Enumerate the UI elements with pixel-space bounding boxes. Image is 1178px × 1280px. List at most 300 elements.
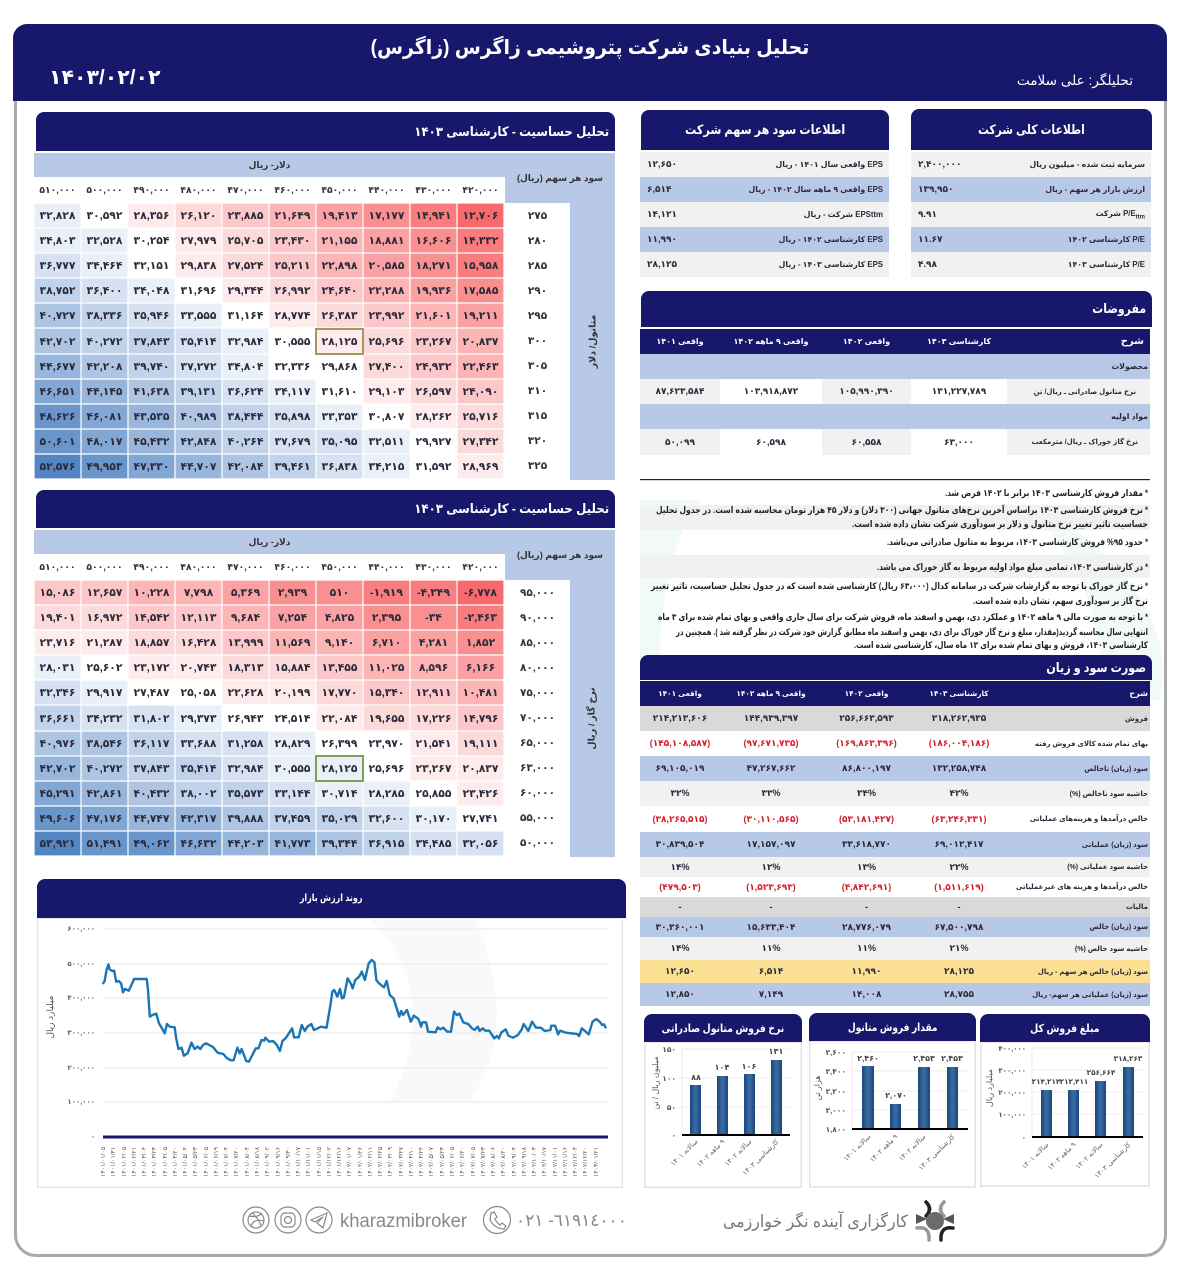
heatmap grid: ۲۶,۳۸۳ — [322, 310, 357, 322]
heatmap grid: ۲۵,۶۰۲ — [87, 662, 122, 674]
income statement table: ۶۹,۱۰۵,۰۱۹ — [656, 763, 704, 773]
heatmap grid: ۳۲,۶۰۰ — [369, 813, 404, 825]
heatmap grid: ۱۸,۲۷۱ — [416, 260, 451, 272]
line chart: ۱۴۰۱/۰۵/۲۳ — [192, 1146, 199, 1177]
heatmap grid: ۲۵,۷۰۵ — [228, 235, 263, 247]
heatmap grid: ۱۹,۹۳۶ — [416, 285, 451, 297]
income statement table: ۱۵,۶۳۳,۴۰۴ — [747, 922, 795, 932]
line chart: ۱۴۰۲/۱۰/۰۳ — [531, 1146, 538, 1177]
bar chart: ۱۰۰,۰۰۰ — [998, 1112, 1026, 1119]
phone number: ٠٢١ -٦١٩١٤٠٠٠ — [516, 1211, 627, 1230]
heading: مفروضات — [1092, 301, 1146, 316]
heatmap grid: ۳۴,۱۱۷ — [275, 386, 310, 398]
heatmap grid: ۲۴,۹۳۲ — [416, 361, 451, 373]
heatmap grid: ۳۹,۴۶۱ — [275, 461, 310, 473]
bar chart: سالانه ۱۴۰۱ — [670, 1138, 700, 1168]
line chart: ۱۴۰۱/۰۷/۰۴ — [223, 1147, 230, 1177]
heatmap grid: ۲۳,۴۳۰ — [275, 235, 310, 247]
eps header: سود هر سهم (ریال) — [517, 550, 603, 560]
heatmap grid: ۲۳,۹۷۰ — [369, 738, 404, 750]
heatmap grid: ۶,۷۱۰ — [372, 637, 401, 649]
heatmap grid: ۲۸,۱۲۵ — [322, 336, 357, 348]
eps table: ۱۱,۹۹۰ — [647, 234, 677, 244]
heatmap grid: ۵۰,۶۰۱ — [40, 436, 75, 448]
bar chart: سالانه ۱۴۰۱ — [843, 1133, 873, 1163]
methanol price labels: ۳۲۰ — [528, 435, 547, 447]
heatmap grid: ۱۹,۶۵۵ — [369, 713, 404, 725]
bar chart: ۲,۴۰۰ — [826, 1067, 846, 1076]
gas price labels — [520, 587, 555, 849]
line chart: ۱۴۰۱/۰۸/۱۸ — [254, 1146, 261, 1177]
income statement table: (۱۸۶,۰۰۴,۱۸۶) — [929, 738, 989, 748]
footer: phone and social contacts — [242, 1206, 627, 1234]
line chart: ۱۴۰۱/۰۴/۰۵ — [162, 1147, 169, 1177]
heatmap grid: ۴۱,۶۳۸ — [134, 386, 169, 398]
dollar values: ۴۹۰,۰۰۰ — [133, 562, 170, 572]
heatmap grid: ۳۵,۴۱۴ — [181, 336, 216, 348]
line chart: ۵۰۰,۰۰۰ — [67, 961, 95, 968]
assumptions table: ۱۰۵,۹۹۰,۳۹۰ — [839, 386, 894, 396]
heatmap grid: ۳۱,۲۵۸ — [228, 738, 263, 750]
income statement table: ۱۳% — [857, 862, 876, 872]
panel: total sales chart — [980, 1014, 1150, 1187]
heatmap grid: ۱۵,۰۸۶ — [40, 587, 75, 599]
bar chart: کارشناسی ۱۴۰۳ — [741, 1137, 781, 1177]
heatmap grid: ۲۹,۸۳۸ — [181, 260, 216, 272]
heatmap grid: ۴۰,۹۷۶ — [40, 738, 75, 750]
info table: ۲,۴۰۰,۰۰۰ — [918, 159, 961, 169]
methanol price labels: ۲۹۰ — [528, 285, 547, 297]
heatmap grid: ۴۲,۳۱۷ — [181, 813, 216, 825]
heading — [37, 879, 626, 918]
line chart: ۱۴۰۱/۱۱/۱۵ — [316, 1147, 323, 1177]
heatmap grid: ۲۹,۹۲۷ — [416, 436, 451, 448]
dollar values — [39, 562, 499, 572]
heatmap grid: ۴۲,۸۴۸ — [181, 436, 216, 448]
line chart: ۱۴۰۲/۰۸/۲۰ — [500, 1147, 507, 1177]
heatmap grid: ۳۶,۶۶۱ — [40, 713, 75, 725]
income statement table: ۲۸,۱۲۵ — [944, 966, 974, 976]
heatmap grid: ۳۷,۸۴۳ — [134, 336, 169, 348]
line chart: ۱۴۰۱/۰۹/۱۶ — [275, 1147, 282, 1177]
heatmap grid: ۴۰,۲۷۲ — [87, 336, 122, 348]
heatmap grid: ۳۰,۸۰۷ — [369, 411, 404, 423]
line chart: ۱۴۰۲/۰۲/۲۵ — [377, 1147, 384, 1177]
heatmap grid: ۳۷,۴۵۹ — [275, 813, 310, 825]
bar chart: ۹ ماهه ۱۴۰۲ — [1047, 1141, 1078, 1172]
line chart: ۱۴۰۲/۰۷/۰۵ — [470, 1147, 477, 1177]
methanol price labels: ۲۹۵ — [528, 310, 547, 322]
heatmap grid: ۲۵,۶۹۶ — [369, 336, 404, 348]
footer: brokerage logo and name — [723, 1200, 955, 1242]
line chart: ۱۴۰۲/۰۸/۰۶ — [490, 1147, 497, 1177]
info table: P/Ettm شرکت — [1096, 209, 1145, 220]
income statement table: مالیات — [1126, 904, 1148, 911]
heatmap grid: ۲۸,۰۳۱ — [40, 662, 75, 674]
line chart: ۱۴۰۱/۱۱/۰۱ — [305, 1147, 312, 1177]
heading: روند ارزش بازار — [300, 893, 363, 904]
income statement table: ۷,۱۴۹ — [759, 989, 783, 999]
heatmap grid: ۳۷,۸۴۳ — [134, 763, 169, 775]
line chart: ۱۴۰۱/۰۵/۰۴ — [182, 1147, 189, 1177]
income statement table: ۳۳% — [762, 788, 780, 798]
heading: نرخ فروش متانول صادراتی — [662, 1022, 784, 1034]
base case highlight — [315, 328, 364, 355]
income statement table: ۱۲,۶۵۰ — [665, 966, 695, 976]
bar chart — [980, 1042, 1150, 1187]
heatmap grid: ۲۳,۴۲۶ — [463, 788, 498, 800]
income statement table: ۸۶,۸۰۰,۱۹۷ — [842, 763, 891, 773]
bar chart: ۸۸ — [691, 1073, 701, 1082]
header banner — [13, 24, 1167, 101]
heatmap grid: ۳۱,۱۶۴ — [228, 310, 263, 322]
gas price labels: ۷۰,۰۰۰ — [520, 712, 555, 724]
heatmap grid: ۳۴,۸۰۳ — [40, 235, 75, 247]
heatmap grid: ۵۱۰ — [330, 587, 349, 599]
heatmap grid: ۵,۳۶۹ — [231, 587, 260, 599]
heatmap grid: ۲۲,۴۶۳ — [463, 361, 498, 373]
icon: phone — [484, 1206, 510, 1234]
bar chart: ۲,۰۰۰ — [826, 1106, 846, 1115]
heatmap grid: ۲,۹۳۹ — [278, 587, 307, 599]
heatmap grid: ۴۲,۷۰۲ — [40, 336, 75, 348]
heatmap grid: ۴,۲۸۱ — [419, 637, 448, 649]
panel: earnings per share info — [640, 110, 889, 277]
income statement table: ۶۹,۰۱۲,۴۱۷ — [935, 839, 983, 849]
income statement table: (۴,۸۴۲,۶۹۱) — [842, 882, 891, 892]
date: ۱۴۰۳/۰۲/۰۲ — [49, 66, 160, 89]
heatmap grid: ۴۵,۴۳۲ — [134, 436, 169, 448]
heatmap grid: ۲۳,۲۶۷ — [416, 763, 451, 775]
eps table: ۲۸,۱۲۵ — [647, 259, 677, 269]
income statement table: - — [770, 902, 772, 912]
bar chart: سالانه ۱۴۰۲ — [1075, 1141, 1105, 1171]
heatmap grid: ۴۸,۰۱۷ — [87, 436, 122, 448]
icon: brokerage logo — [916, 1202, 954, 1240]
heatmap grid: ۳۲,۱۵۱ — [134, 260, 169, 272]
heatmap grid: ۲۳,۷۱۶ — [40, 637, 75, 649]
income statement table: کارشناسی ۱۴۰۳ — [929, 689, 989, 698]
eps table — [640, 152, 889, 277]
panel: methanol sales volume chart — [809, 1013, 976, 1188]
bar chart: ۲۱۴,۲۱۴ — [1032, 1077, 1061, 1086]
income statement table: سود (زیان) عملیاتی — [1082, 842, 1148, 848]
line chart: ۱۴۰۲/۰۱/۰۷ — [346, 1146, 353, 1177]
heatmap grid: ۲۹,۱۰۳ — [369, 386, 404, 398]
heatmap grid: ۴۹,۶۰۶ — [40, 813, 75, 825]
income statement table: (۳۸,۲۶۵,۵۱۵) — [653, 814, 707, 824]
dollar values: ۴۹۰,۰۰۰ — [133, 185, 170, 195]
heading: تحلیل حساسیت - کارشناسی ۱۴۰۳ — [414, 501, 609, 516]
line chart: ۱۴۰۱/۱۰/۱۷ — [295, 1146, 302, 1177]
info table: P/E کارشناسی ۱۴۰۳ — [1068, 260, 1145, 269]
line chart: ۱۴۰۱/۰۲/۰۵ — [121, 1147, 128, 1177]
heatmap grid: ۱۶,۶۰۶ — [416, 235, 451, 247]
heatmap grid: ۱۷,۲۲۶ — [416, 713, 451, 725]
heatmap grid: ۲۷,۵۲۴ — [228, 260, 263, 272]
heading — [640, 655, 1152, 680]
heatmap grid: -۴,۳۴۹ — [417, 587, 450, 599]
gas price labels: ۹۵,۰۰۰ — [520, 587, 555, 599]
line chart: ۱۴۰۲/۰۹/۰۴ — [511, 1147, 518, 1177]
bar chart: ۲,۴۶۰ — [857, 1054, 879, 1063]
assumptions table: ۶۰,۵۵۸ — [852, 436, 881, 446]
heatmap grid: ۲۹,۳۴۴ — [228, 285, 263, 297]
icon: instagram — [275, 1207, 301, 1233]
panel: company general info — [911, 109, 1152, 277]
heatmap grid: ۲۰,۵۸۵ — [369, 260, 404, 272]
heatmap grid: ۴۶,۰۸۱ — [87, 411, 122, 423]
income statement table: ۲۵۶,۶۶۳,۵۹۳ — [839, 713, 894, 723]
heatmap grid: ۲۱,۶۰۱ — [416, 310, 451, 322]
dollar values: ۴۲۰,۰۰۰ — [462, 185, 499, 195]
bar chart: ۲,۲۰۰ — [826, 1087, 846, 1096]
income statement table: سود (زیان) خالص هر سهم - ریال — [1038, 968, 1148, 976]
bar chart — [644, 1042, 802, 1188]
heatmap grid: ۱۰,۲۲۸ — [134, 587, 169, 599]
dollar values: ۵۰۰,۰۰۰ — [86, 185, 123, 195]
heading — [641, 291, 1152, 327]
income statement table: ۱۴% — [670, 943, 690, 953]
assumptions table: واقعی ۹ ماهه ۱۴۰۲ — [733, 337, 809, 346]
assumptions table: کارشناسی ۱۴۰۳ — [927, 337, 991, 346]
heatmap grid: ۲۵,۶۹۶ — [369, 763, 404, 775]
income statement table: (۵۳,۱۸۱,۴۲۷) — [839, 814, 894, 824]
heatmap grid: ۳۸,۳۳۶ — [87, 310, 122, 322]
income statement table: (۴۷۹,۵۰۳) — [659, 882, 701, 892]
heatmap grid: ۱۸,۸۵۷ — [134, 637, 169, 649]
heatmap grid: ۲۷,۴۸۷ — [134, 687, 169, 699]
heatmap grid: ۲۲,۸۹۸ — [322, 260, 357, 272]
bar chart: ۱۳۱ — [769, 1047, 783, 1056]
heatmap grid: ۲۶,۳۹۹ — [322, 738, 357, 750]
line chart: ۱۴۰۲/۱۰/۱۷ — [541, 1146, 548, 1177]
heatmap grid: ۲۵,۸۵۵ — [416, 788, 451, 800]
heatmap grid: ۲۷,۷۴۱ — [463, 813, 498, 825]
heatmap grid: ۳۲,۵۱۱ — [369, 436, 404, 448]
income statement table: سود (زیان) خالص — [1089, 924, 1148, 931]
heatmap grid: ۳۲,۹۸۴ — [228, 336, 263, 348]
heatmap grid: ۲۹,۸۶۸ — [322, 361, 357, 373]
heatmap grid: ۳۹,۳۴۴ — [322, 838, 357, 850]
heatmap grid: ۳۰,۲۵۴ — [134, 235, 169, 247]
heatmap grid: ۴۰,۲۶۴ — [228, 436, 263, 448]
income statement table: شرح — [1129, 689, 1148, 698]
heading — [911, 109, 1152, 150]
bar chart: ۱۰۰ — [662, 1074, 676, 1083]
heatmap grid: ۳۹,۸۸۸ — [228, 813, 263, 825]
bar chart: هزار تن — [813, 1075, 822, 1101]
heatmap grid: ۱۸,۳۱۳ — [228, 662, 263, 674]
heatmap grid: ۴۰,۷۲۷ — [40, 310, 75, 322]
heatmap grid: ۴۸,۶۲۶ — [40, 411, 75, 423]
bar chart: ۲,۰۷۰ — [885, 1091, 907, 1100]
eps table: EPS کارشناسی ۱۴۰۲ - ریال — [779, 235, 883, 244]
eps table: ۱۲,۶۵۰ — [647, 159, 677, 169]
side axis label — [570, 203, 615, 480]
assumptions table: ۶۳,۰۰۰ — [944, 436, 974, 446]
heatmap grid: ۴۴,۱۴۵ — [87, 386, 122, 398]
heatmap grid: ۲۱,۶۴۹ — [275, 210, 310, 222]
heatmap grid: ۱۹,۴۰۱ — [40, 612, 75, 624]
income statement table: ۱۲,۸۵۰ — [665, 989, 695, 999]
heatmap grid: ۲۳,۹۹۲ — [369, 310, 404, 322]
line chart: ۱۴۰۱/۰۶/۰۵ — [203, 1147, 210, 1177]
heatmap grid: ۳۴,۰۴۸ — [134, 285, 169, 297]
dollar values: ۴۶۰,۰۰۰ — [274, 185, 311, 195]
heatmap grid: ۴۶,۶۳۲ — [181, 838, 216, 850]
heatmap grid: ۲۱,۱۵۵ — [322, 235, 357, 247]
bar chart: میلیون ریال / تن — [651, 1056, 660, 1110]
heatmap grid: ۲۸,۲۶۲ — [416, 411, 451, 423]
heatmap grid — [34, 204, 504, 478]
heatmap grid — [34, 580, 504, 856]
income statement table: ۱۴۴,۹۳۹,۳۹۷ — [744, 713, 798, 723]
info table: ۱۳۹,۹۵۰ — [918, 184, 953, 194]
heading — [644, 1014, 802, 1042]
assumptions table: نرخ گاز خوراک ـ ریال/ مترمکعب — [1031, 439, 1138, 446]
heatmap grid: ۱۵,۹۵۸ — [463, 260, 498, 272]
notes block: * در کارشناسی ۱۴۰۳، تمامی مبلغ مواد اولیه مربوط به گاز خوراک می باشد. — [877, 561, 1148, 573]
dollar rate header — [34, 153, 505, 177]
heatmap grid: ۱۹,۱۱۱ — [463, 738, 498, 750]
gas price labels: ۷۵,۰۰۰ — [520, 687, 555, 699]
heatmap grid: ۳۵,۰۲۹ — [322, 813, 357, 825]
eps table: ۱۴,۱۲۱ — [647, 209, 677, 219]
heatmap grid: ۲۰,۸۳۷ — [463, 763, 498, 775]
heading: مبلغ فروش کل — [1030, 1022, 1100, 1034]
heatmap grid: ۷,۷۹۸ — [184, 587, 213, 599]
heatmap grid: ۱۲,۹۱۱ — [416, 687, 451, 699]
heatmap grid: -۱,۹۱۹ — [370, 587, 403, 599]
bar chart: ۳۰۰,۰۰۰ — [998, 1068, 1026, 1075]
heading — [980, 1014, 1150, 1042]
bar chart: سالانه ۱۴۰۲ — [724, 1138, 754, 1168]
heatmap grid: ۲۷,۹۷۹ — [181, 235, 216, 247]
line chart: ۱۴۰۲/۰۶/۲۰ — [459, 1147, 466, 1177]
dollar values: ۴۸۰,۰۰۰ — [180, 185, 217, 195]
methanol price labels: ۳۲۵ — [528, 460, 547, 472]
methanol price labels: ۲۸۰ — [528, 235, 547, 247]
heatmap grid: ۲۶,۵۹۷ — [416, 386, 451, 398]
line chart: میلیارد ریال — [45, 995, 55, 1038]
assumptions table: مواد اولیه — [1111, 412, 1148, 421]
gas price labels: ۶۵,۰۰۰ — [520, 737, 555, 749]
heatmap grid: -۲,۴۶۳ — [464, 612, 497, 624]
income statement table: ۳۲% — [670, 788, 690, 798]
panel: sensitivity table methanol-dollar — [34, 112, 615, 480]
heatmap grid: ۳۱,۸۰۲ — [134, 713, 169, 725]
income statement table: ۳۰,۳۶۰,۰۰۱ — [656, 922, 704, 932]
heatmap grid: ۱۱,۰۲۵ — [369, 662, 404, 674]
income statement table: ۱۴,۰۰۸ — [852, 989, 881, 999]
line chart: ۱۴۰۲/۱۱/۱۶ — [562, 1147, 569, 1177]
eps header: سود هر سهم (ریال) — [517, 172, 603, 182]
line chart: ۱۴۰۲/۰۹/۱۸ — [521, 1146, 528, 1177]
heatmap grid: ۵۱,۴۹۱ — [87, 838, 122, 850]
income statement table: خالص درآمدها و هزینه‌های عملیاتی — [1030, 816, 1148, 823]
brokerage name: کارگزاری آینده نگر خوارزمی — [723, 1210, 909, 1231]
heading — [809, 1013, 976, 1041]
heatmap grid: ۴,۸۲۵ — [325, 612, 354, 624]
income statement table: ۴۲% — [950, 788, 968, 798]
info table: ۴.۹۸ — [918, 259, 937, 269]
notes block: * با توجه به صورت مالی ۹ ماهه ۱۴۰۲ و عملکرد دی، بهمن و اسفند ماه، فروش شرکت برای سال جاری واقعی و بهای تمام شده برای ۳ ماه — [658, 612, 1148, 623]
line chart: ۱۴۰۱/۰۶/۱۹ — [213, 1146, 220, 1177]
income statement table: ۱۷,۱۵۷,۰۹۷ — [747, 839, 795, 849]
eps table: EPSttm شرکت - ریال — [804, 210, 883, 219]
heatmap grid: ۲۵,۷۱۶ — [463, 411, 498, 423]
heatmap grid: ۳۲,۵۲۸ — [87, 235, 122, 247]
income statement table: ۱۱,۹۹۰ — [852, 966, 881, 976]
heatmap grid: ۲۹,۳۷۳ — [181, 713, 216, 725]
eps table: ۶,۵۱۴ — [647, 184, 671, 194]
income statement table: ۲۸,۷۷۶,۰۷۹ — [842, 922, 891, 932]
income statement table: ۱۳۲,۲۵۸,۷۴۸ — [932, 763, 986, 773]
heatmap grid: ۲۳,۱۷۲ — [134, 662, 169, 674]
heatmap grid: ۲۸,۲۸۵ — [369, 788, 404, 800]
bar chart — [809, 1041, 976, 1188]
heatmap grid: ۳۲,۳۳۶ — [275, 361, 310, 373]
income statement table: (۳۰,۱۱۰,۵۶۵) — [744, 814, 798, 824]
heatmap grid: -۶,۷۷۸ — [464, 587, 497, 599]
line chart: ۳۰۰,۰۰۰ — [67, 1030, 95, 1037]
heatmap grid: ۴۰,۹۸۹ — [181, 411, 216, 423]
line chart: ۱۴۰۲/۰۴/۲۴ — [418, 1147, 425, 1177]
line chart: ۱۴۰۲/۰۵/۲۳ — [439, 1146, 446, 1177]
gas price labels: ۹۰,۰۰۰ — [520, 612, 555, 624]
side axis label — [570, 580, 615, 857]
bar chart: ۱۰۴ — [715, 1063, 729, 1072]
heatmap grid: ۱۴,۵۴۲ — [134, 612, 169, 624]
heatmap grid: ۲۲,۲۸۸ — [369, 285, 404, 297]
heading — [36, 490, 615, 528]
heatmap grid: ۱۹,۴۱۳ — [322, 210, 357, 222]
heatmap grid: ۳۹,۱۳۱ — [181, 386, 216, 398]
heatmap grid: ۳۵,۵۷۳ — [228, 788, 263, 800]
income statement table: ۳۱۸,۲۶۲,۹۳۵ — [932, 713, 986, 723]
methanol price labels — [528, 210, 547, 472]
assumptions table: ۱۰۳,۹۱۸,۸۷۲ — [744, 386, 798, 396]
heatmap grid: ۳۴,۲۱۵ — [369, 461, 404, 473]
dollar values: ۴۵۰,۰۰۰ — [321, 185, 358, 195]
heatmap grid: ۲۶,۹۹۲ — [275, 285, 310, 297]
income statement table: سود (زیان) ناخالص — [1084, 766, 1148, 772]
heatmap grid: ۲۲,۶۲۸ — [228, 687, 263, 699]
website handle: kharazmibroker — [340, 1211, 468, 1232]
dollar values: ۵۰۰,۰۰۰ — [86, 562, 123, 572]
info table: ۱۱.۶۷ — [918, 234, 942, 244]
heatmap grid: ۱۱,۵۶۹ — [275, 637, 310, 649]
assumptions table: ۵۰,۰۹۹ — [665, 436, 695, 446]
heatmap grid: ۳۵,۴۱۴ — [181, 763, 216, 775]
heatmap grid: ۱۵,۳۴۰ — [369, 687, 404, 699]
line chart: ۱۴۰۱/۰۱/۳۱ — [110, 1147, 117, 1177]
income statement table: ۶,۵۱۴ — [759, 966, 783, 976]
heatmap grid: ۳۸,۰۰۲ — [181, 788, 216, 800]
bar chart: سالانه ۱۴۰۲ — [898, 1133, 928, 1163]
income statement table: حاشیه سود ناخالص (%) — [1070, 790, 1148, 798]
line chart: ۰ — [91, 1134, 95, 1141]
heatmap grid: ۴۴,۷۴۷ — [134, 813, 169, 825]
heatmap grid: ۲۰,۸۳۷ — [463, 336, 498, 348]
heatmap grid: ۲۸,۹۶۹ — [463, 461, 498, 473]
eps table: EPS واقعی ۹ ماهه سال ۱۴۰۲ - ریال — [749, 185, 883, 194]
heatmap grid: ۱۹,۲۱۱ — [463, 310, 498, 322]
methanol price labels: ۲۸۵ — [528, 260, 547, 272]
income statement table: خالص درآمدها و هزینه های غیرعملیاتی — [1016, 884, 1148, 891]
assumptions table — [640, 329, 1150, 455]
